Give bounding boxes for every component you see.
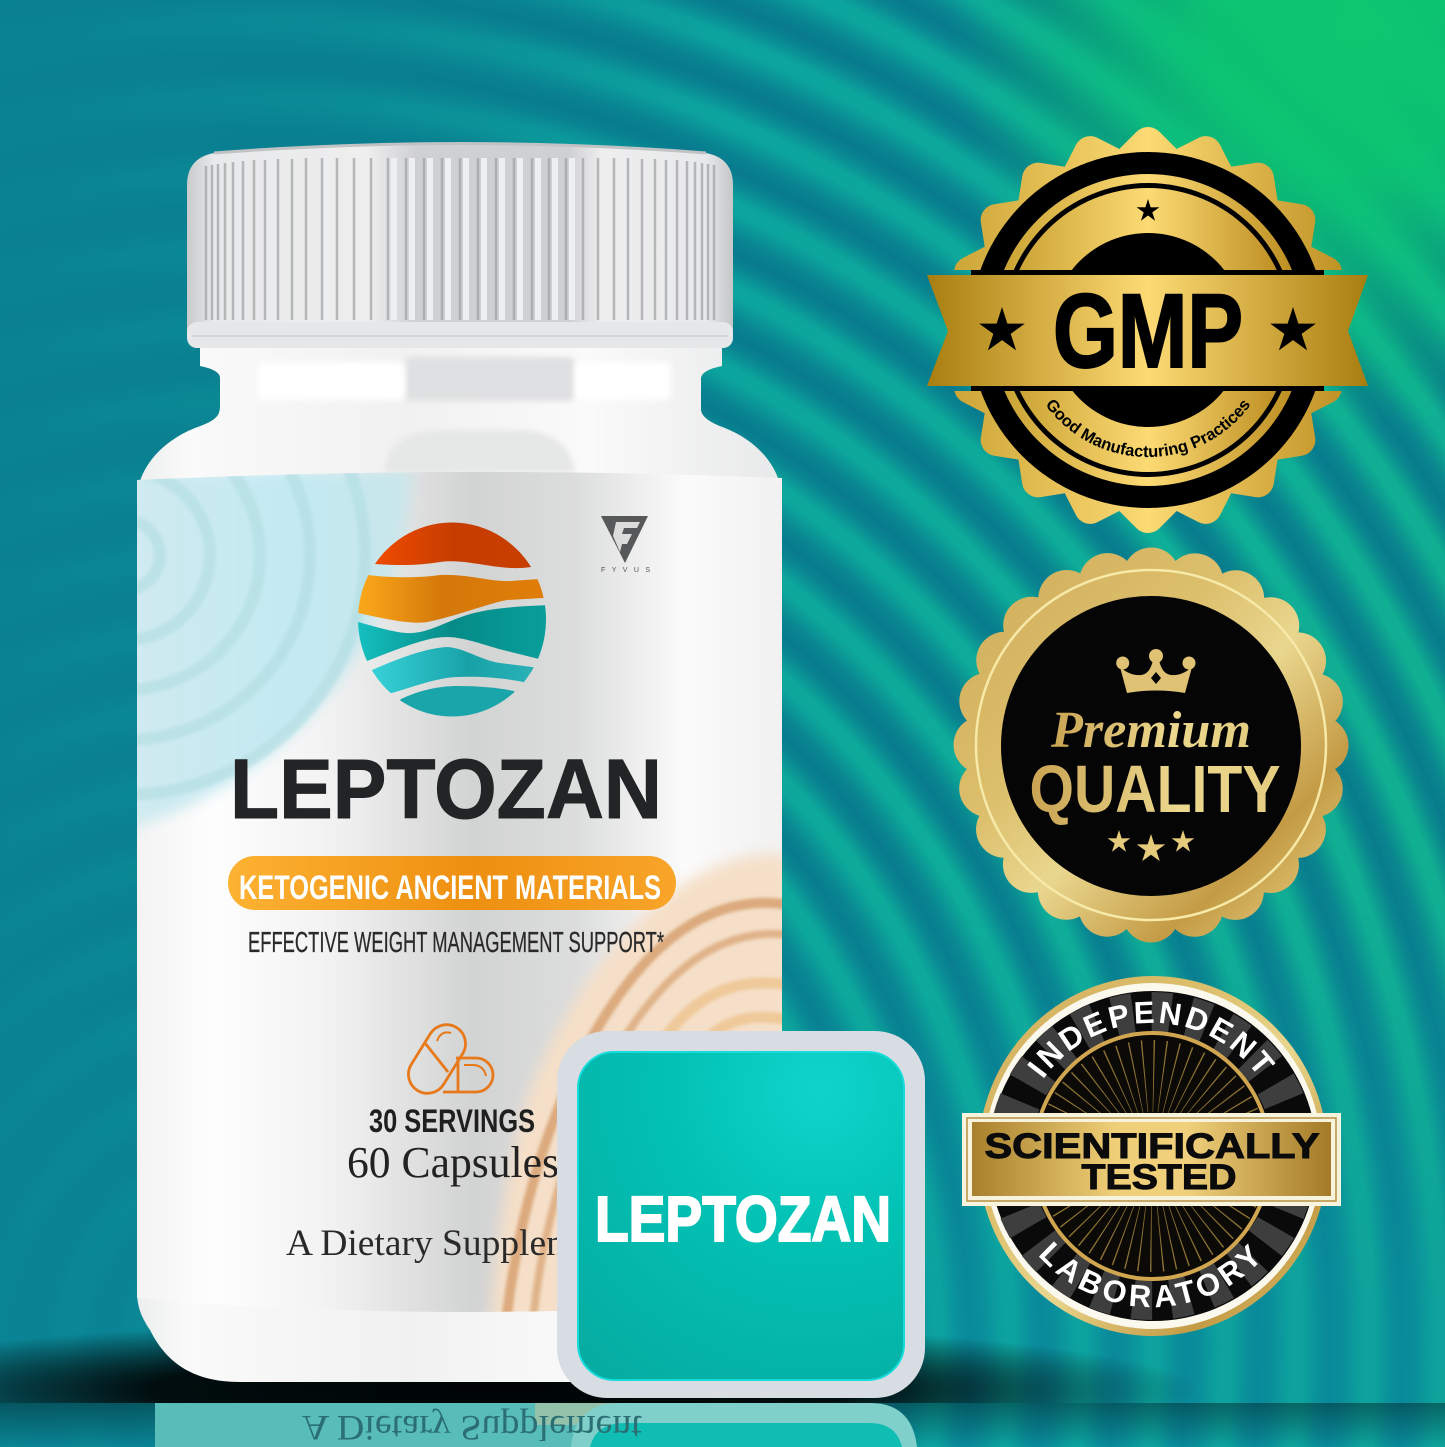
label background circles <box>0 315 790 1330</box>
right ribbon star <box>1270 307 1316 350</box>
servings: 30 SERVINGS <box>369 1103 535 1139</box>
badge: GMP <box>927 127 1368 533</box>
ribbon <box>927 275 1368 386</box>
subheading: EFFECTIVE WEIGHT MANAGEMENT SUPPORT* <box>248 927 664 959</box>
left ribbon star <box>979 307 1025 350</box>
bottle reflection: A Dietary Supplement <box>302 1408 642 1447</box>
badge: Scientifically Tested <box>962 976 1341 1336</box>
product bottle <box>136 142 782 1382</box>
bottle body <box>137 347 782 1382</box>
star <box>1137 199 1159 221</box>
badge: Premium Quality <box>966 560 1336 930</box>
bottle reflection <box>155 1403 917 1447</box>
capsule count: 60 Capsules <box>347 1138 559 1187</box>
neck shading <box>258 357 671 473</box>
label base <box>137 472 782 1312</box>
curved bottom text: LABORATORY <box>1039 1241 1258 1308</box>
manufacturer mark: FYVUS <box>601 567 650 574</box>
three stars <box>1108 830 1194 861</box>
curved top text: INDEPENDENT <box>1027 1002 1276 1078</box>
Premium: Premium <box>1050 702 1251 759</box>
bottle cap <box>187 144 733 348</box>
orange pill tagline: KETOGENIC ANCIENT MATERIALS <box>239 869 661 907</box>
ribbon text line 2: TESTED <box>1082 1158 1236 1197</box>
icon: capsules <box>401 1018 493 1100</box>
box brand name: LEPTOZAN <box>595 1183 891 1255</box>
curved caption: Good Manufacturing Practices <box>1047 400 1250 458</box>
GMP text: GMP <box>1053 273 1243 390</box>
floor gradient <box>0 1403 1445 1447</box>
QUALITY: QUALITY <box>1030 752 1280 827</box>
dietary supplement line: A Dietary Supplement <box>286 1223 622 1264</box>
orange pill tagline <box>228 856 676 910</box>
brand logo: sun and waves <box>358 522 546 716</box>
product box <box>557 1031 925 1398</box>
ribbon <box>962 1113 1341 1206</box>
ribbon text line 1: SCIENTIFICALLY <box>984 1127 1320 1166</box>
manufacturer mark <box>601 516 650 574</box>
floor shadow <box>0 1290 1445 1403</box>
brand name: LEPTOZAN <box>230 742 662 836</box>
icon: crown <box>1116 649 1196 693</box>
